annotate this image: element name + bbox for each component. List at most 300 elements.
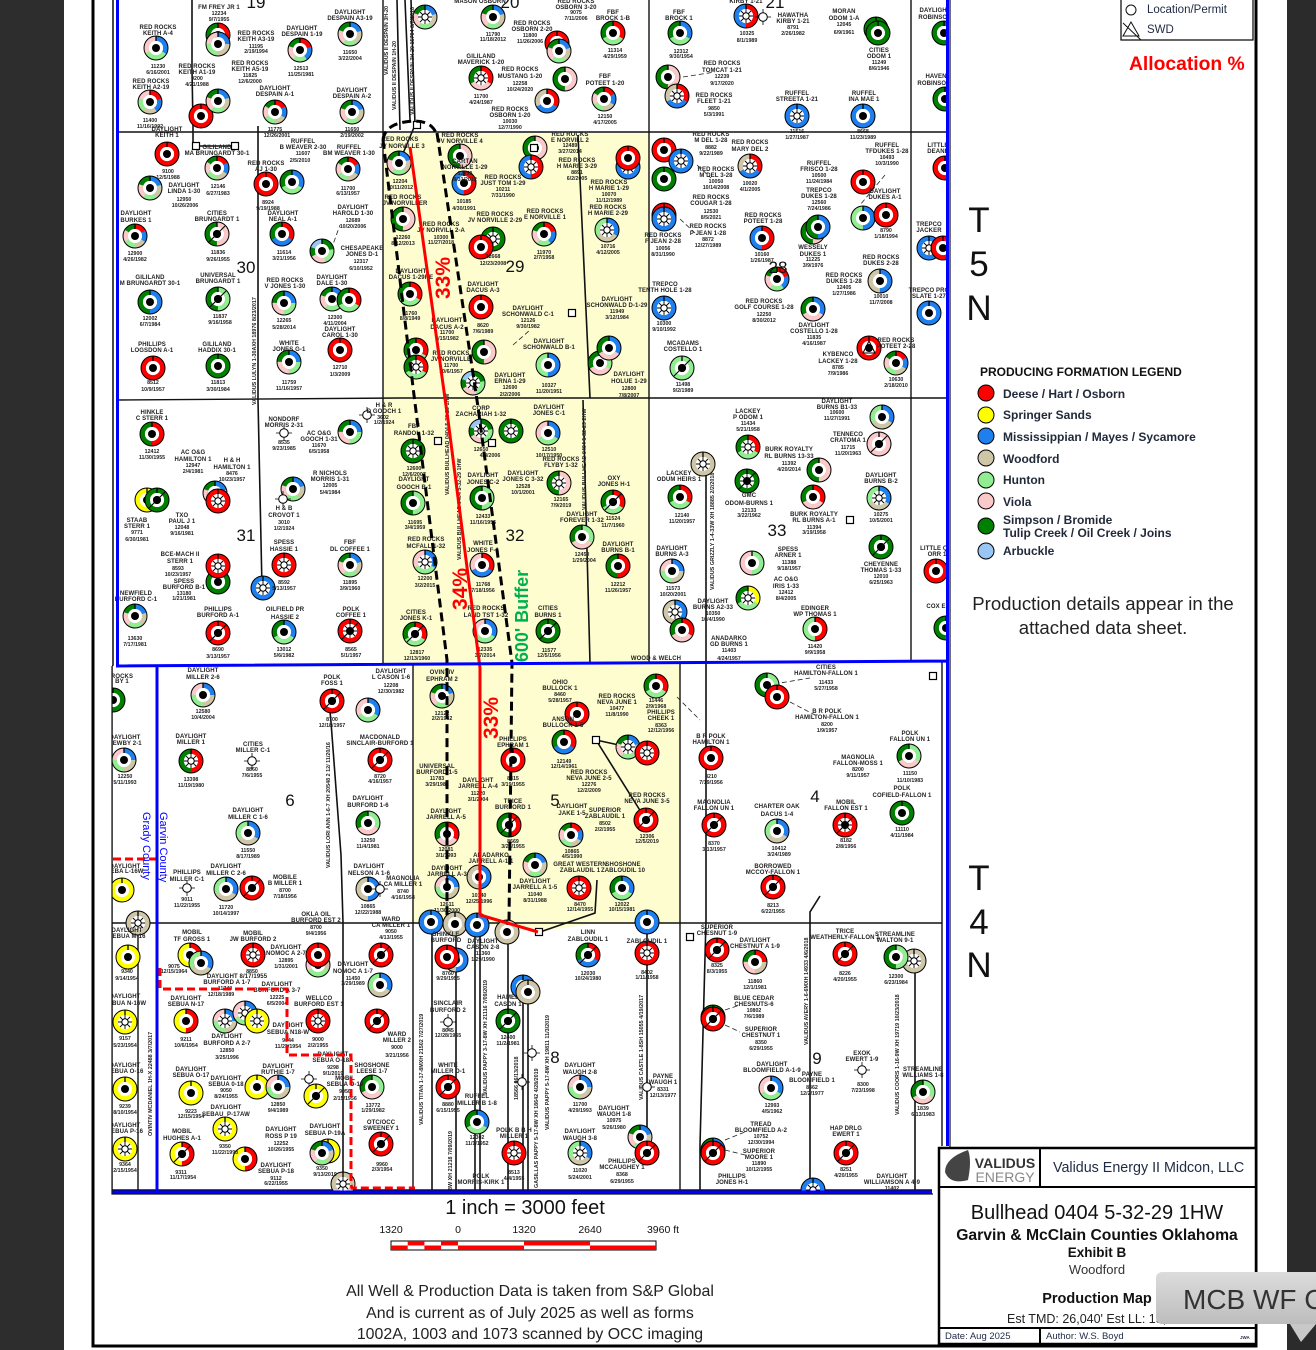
section 4 well names: MAGNOLIA [697,800,731,806]
section 29 well names: RED ROCKS [527,209,563,215]
sections 20-21 well data: 11800 [523,33,537,39]
section 6 well names: DAYLIGHT [176,734,207,740]
section 31 well data: 5/4/1984 [320,490,340,496]
section 29 well data: 10070 [602,192,616,198]
section 5 well data: 12276 [582,782,596,788]
section 33 well data: 12133 [742,508,756,514]
section 29 well names: NORVILLE 1-29 [442,165,488,171]
section 33 well data: 11420 [808,644,822,650]
section 28 well data: 9/2/1989 [673,388,693,394]
section 7 well names: DAYLIGHT [112,928,143,934]
section 8 well names: WHITE [438,1063,458,1069]
section 7 well names: HUGHES A-1 [163,1136,201,1142]
section 29 well names: JV NORVILLER [383,201,428,207]
section 29 well data: 9/30/1982 [516,324,540,330]
section 33 well data: 4/20/2014 [777,467,801,473]
producing formation legend [978,365,1196,559]
section 28 well data: 10/3/1990 [875,161,899,167]
section 33 well names: GD BURNS 1 [710,642,749,648]
section 7 well names: SEBUA P-18 [258,1169,295,1175]
section 32 well data: 12200 [418,576,432,582]
section numbers: 6 [285,791,295,810]
section 7 well data: 9157 [119,1036,131,1042]
section 29 well data: 8/12/2013 [391,241,415,247]
legend: Arbuckle [978,543,1055,559]
sections 20-21 well names: OSBORN 1-20 [489,113,531,119]
section 29 well data: 10716 [601,244,615,250]
section 9 well names: SUPERIOR [701,925,734,931]
section 5 well names: PHILLIPS [647,710,675,716]
section 5 well data: 3/1/2004 [468,797,488,803]
allocation percentages and buffer label: 34% [449,568,472,610]
section 32 well names: JONES K-1 [400,616,433,622]
section 5 well names: JARRELL A-1 1 [469,859,514,865]
section 31 well data: 7/17/1981 [123,642,147,648]
section 33 well names: RL BURNS 13-33 [764,454,814,460]
section 28 well names: DAYLIGHT [799,323,830,329]
section 32 well names: BURNS 1 [534,613,562,619]
section 28 well names: POTEET 2-28 [877,344,916,350]
section 33 well data: 10/20/2001 [660,592,686,598]
sections 20-21 well names: POTEET 1-20 [586,81,625,87]
section 5 well data: 11446 [649,698,663,704]
section 31 [115,403,402,660]
section 28 well names: TFDUKES 1-28 [865,149,909,155]
section 7 well data: 9340 [121,969,133,975]
yellow highlighted unit sections [383,133,680,932]
section 8 [419,910,678,1186]
section 29 well data: 8620 [477,323,489,329]
rotated lateral labels: 18566 06/13/2018 [514,1057,520,1100]
section 7 well data: 10/26/1955 [268,1147,294,1153]
section 8 well names: DAYLIGHT [468,939,499,945]
section 31 well names: BURFORD A-1 [197,613,240,619]
section 5 well names: RED ROCKS [629,793,665,799]
section 6 well data: 8720 [374,774,386,780]
section 19 well names: DAYLIGHT [287,26,318,32]
section 29 well names [379,132,648,385]
section 28 well data: 8882 [705,145,717,151]
section 33 well names: RL BURNS A-1 [792,518,836,524]
section 19 well names: DAYLIGHT [335,10,366,16]
section 32 well names: FOREVER 1-32 [560,518,604,524]
section 31 well data: 13180 [177,591,191,597]
section 7 well names: DAYLIGHT [110,1063,141,1069]
section 28 well data: 9/10/1992 [652,327,676,333]
section 33 well data: 3/19/1958 [802,530,826,536]
sections 20-21 well names: GILILAND [466,54,496,60]
section 7 well names: DAYLIGHT [338,962,369,968]
section 7 well data: 8/10/1954 [113,1110,137,1116]
section 31 well names: H & B [276,506,293,512]
600 ft buffer dashed lines [383,121,512,922]
section 7 well data: 1/29/1982 [361,1108,385,1114]
section 31 well names: BURFORD B-1 [163,585,206,591]
section 5 well names: JARRELL A-5 [426,815,466,821]
section 5 well names: EPHRAM 1 [497,743,529,749]
sections 20-21 well names: CITIES [869,48,889,54]
section 33 well data: 11403 [722,648,736,654]
section 31 well data: 8565 [345,647,357,653]
sections 20-21 well names: STREETA 1-21 [776,97,819,103]
map frame black outer [112,0,950,1194]
section 30 well names: PHILLIPS [138,342,166,348]
section 29 well data: 11949 [610,309,624,315]
section 7 well names: OTC/OCC [367,1120,396,1126]
section 19 well data: 11/25/1981 [288,72,314,78]
section 30 well data: 5/28/2014 [272,325,296,331]
section 28 well data: 12/27/1989 [695,243,721,249]
section 32 well data: 12335 [478,647,492,653]
section 7 well data: 9239 [119,1104,131,1110]
section 32 well data: 3/2/2015 [415,583,435,589]
section 5 well data: 11783 [430,776,444,782]
section 9 well data: 11402 [885,1186,899,1192]
section 31 well names: HASSIE 2 [271,615,300,621]
section 31 well names: D GOOCH 1 [367,409,402,415]
section 5 well data: 10865 [565,849,579,855]
section 28 well data: 10500 [812,173,826,179]
section 28 well data: 10056 [656,246,670,252]
section 6 well names: MILLER C-1 [170,877,205,883]
section 19 well names: KEITH A2-19 [133,85,170,91]
section 33 well names: ODOM-BURNS 1 [725,501,774,507]
section 29 well names: DAYLIGHT [468,282,499,288]
section 30 well data: 11614 [277,250,291,256]
section 7 well names: SWEENEY 1 [363,1126,399,1132]
section 5 well names: NEVA JUNE 2-5 [566,776,612,782]
section 8 well names: HAMEL [497,995,519,1001]
section 28 well names: M DEL 1-28 [694,138,728,144]
section 33 well names: IRIS 1-33 [773,584,800,590]
section 9 well data: 12/2/1977 [800,1091,824,1097]
section numbers: 33 [768,521,786,540]
section 32 well data: 3/7/2014 [475,653,495,659]
section 6 well data: 8/17/1989 [236,854,260,860]
section 7 well names: MILLER 2 [383,1038,412,1044]
section 6 well names: MILLER 2-6 [186,675,220,681]
section 7 well names: SEBUA O-17 [173,1073,210,1079]
section 6 well names: DAYLIGHT [188,668,219,674]
section 31 well data: 11/30/1955 [139,455,165,461]
section 33 well data: 11/20/1963 [835,451,861,457]
section 28 well names: DUKES 1-28 [801,194,837,200]
section 6 wells [101,683,392,935]
company logo [945,1150,1035,1185]
section 30 well data: 6/27/1983 [206,191,230,197]
section 5 well names: BURFORD 1-5 [416,770,458,776]
section 7 well names: DAYLIGHT [110,1123,141,1129]
county labels: Grady County [140,812,152,880]
section 33 well data: 12010 [874,574,888,580]
section 7 well names: SEBUA O-16 [107,1069,144,1075]
section 8 well names: SHINKLE [432,932,460,938]
legend: Viola [978,493,1032,509]
section 29 well names: DAYLIGHT [495,373,526,379]
section 19 well names: FM FREY JR 1 [198,5,240,11]
section 29 well data: 12800 [622,386,636,392]
section 31 well names: H & H [224,458,240,464]
section 6 well data: 11/22/1955 [174,903,200,909]
section 31 well data: 9/16/1981 [170,531,194,537]
section 33 well data: 10/4/1990 [701,617,725,623]
section 4 well names: BORROWED [754,864,792,870]
section 28 well names: LACKEY 1-28 [818,359,858,365]
section 6 well data [113,683,415,941]
section 7 well data: 2/2/1955 [308,1043,328,1049]
section 8 well data: 8331 [657,1087,669,1093]
section 4 well names: DACUS 1-4 [761,812,794,818]
section 6 well names: POLK [323,675,341,681]
section 33 [655,399,902,662]
section 7 well names: DAYLIGHT [171,996,202,1002]
section 32 well names: DAYLIGHT [534,405,565,411]
section 9 well names: EXOK [853,1051,871,1057]
section 7 well names: DAYLIGHT [273,1023,304,1029]
section 31 well data: 3010 [278,520,290,526]
section 33 well data: 9/9/1958 [805,650,825,656]
section 6 well names: SEBA L-16W [106,869,144,875]
section 30 well data: 12/5/1988 [156,175,180,181]
section 33 well names: DAYLIGHT [657,546,688,552]
section 30 well names: BRUNGARDT 1 [195,217,240,223]
section 5 well data: 8470 [574,902,586,908]
section 7 well names: SEBUA O-19 [327,1082,364,1088]
section 9 well data: 12300 [889,974,903,980]
title block: Validus Energy II Midcon, LLC [1053,1160,1244,1176]
title block: Author: W.S. Boyd [1046,1331,1124,1342]
east edge labels [909,8,954,610]
section 28 well names: RED ROCKS [693,195,729,201]
section 5 well data: 12/5/2019 [635,839,659,845]
sections 20-21 well names: RUFFEL [785,91,809,97]
section 29 well names: JV NORVILLE [431,357,471,363]
sections 20-21 well data: 12045 [837,22,851,28]
section 9 well names: TREAD [750,1122,772,1128]
section 30 well names [120,127,383,354]
section 7 well names: NOMOC A 1-7 [333,969,374,975]
section 30 well data [123,151,373,393]
sections 20-21 well names: BROCK 1-B [596,16,631,22]
section 19 well data: 9200 [191,76,203,82]
sections 20-21 well data: 2/26/1982 [781,31,805,37]
section 28 well data: 10010 [874,294,888,300]
section 6 well data: 12/30/1982 [378,689,404,695]
section 9 well data: 8300 [857,1082,869,1088]
section 19 well names: DESPAIN A-2 [333,94,372,100]
legend: Viola: Viola [1003,495,1032,509]
production note [972,593,1234,638]
section 8 well names: DAYLIGHT [565,1063,596,1069]
section 9 well names: CHESNUT 1-9 [697,931,738,937]
section 30 wells [123,142,361,380]
section 7 well names: SEBUA N-16W [104,1001,146,1007]
east edge labels: SLATE 1-27 [912,294,947,300]
section 9 well data: 8325 [711,963,723,969]
section 9 well data: 7/23/1998 [851,1088,875,1094]
rotated lateral labels: VALIDUS II DESPAIN 3H-20 15794 6/7/2018 [410,7,416,115]
section 31 well data: 3602 [377,415,389,421]
section 31 well data: 5/1/1957 [341,653,361,659]
section 4 well data: 3/24/1989 [767,852,791,858]
section 5 well data: 8363 [655,723,667,729]
section 6 well data: 8700 [326,717,338,723]
section 6 well names: FOSS 1 [321,681,344,687]
surface location markers [192,122,936,940]
section 33 well data: 12412 [779,590,793,596]
section 5 well data: 3/19/1955 [501,782,525,788]
section 31 well data: 5/6/1982 [274,653,294,659]
section 8 well data: 5/24/2001 [568,1175,592,1181]
section 4 well data: 10412 [772,846,786,852]
section 19 well data: 11825 [243,73,257,79]
section 8 well data: 5/26/1980 [602,1125,626,1131]
section 9 well names: STREAMLINE [875,932,915,938]
section 7 well names: DAYLIGHT [211,1105,242,1111]
section 32 well names [394,405,681,662]
section 8 well data: 11360 [476,951,490,957]
sections 20-21 well names: RED ROCKS [696,93,732,99]
section 7 well names: BURFORD A 3-7 [253,988,301,994]
section 7 well names: SHOSHONE [354,1063,390,1069]
section 7 well data: 9075 [168,964,180,970]
section 5 well data: 2/9/1968 [646,704,666,710]
sections 20-21 well data: 1/27/1987 [785,135,809,141]
section 31 well data: 8690 [212,647,224,653]
sections 20-21 well data: 5/3/1991 [704,112,724,118]
legend: Deese: Deese / Hart / Osborn [1003,387,1125,401]
section 33 wells [660,405,894,642]
section 7 well data: 9364 [119,1162,131,1168]
township labels: 4 [969,903,989,942]
section 5 well names: PHILLIPS [499,737,527,743]
title block: Exhibit B [1068,1245,1126,1260]
section 31 well names: HAMILTON 1 [174,457,212,463]
section 4 well data: 11110 [895,827,909,833]
section 19 well names: DESPAIN A-1 [256,92,295,98]
rotated lateral labels: VALIDUS BULLHEAD 0404 5-32-29 1HW [457,458,463,560]
section 6 well data: 13398 [184,777,198,783]
section 33 well data: 11715 [841,445,855,451]
section 7 well data: 8850 [246,969,258,975]
section 8 well data: 8513 [508,1170,520,1176]
section 33 well names: SPESS [778,547,798,553]
section 9 well data: 8350 [755,1040,767,1046]
section 32 well names: ZACHARIAH 1-32 [456,412,507,418]
sections 20-21 well names: MUSTANG 1-20 [498,74,543,80]
section 32 well names: CORP [472,406,490,412]
section 8 well data: 6/15/1955 [436,1108,460,1114]
section 28 well data: 1/18/1994 [874,234,898,240]
section 19 well names: RED ROCKS [232,61,268,67]
section 7 well names: DAYLIGHT [261,1163,292,1169]
section 28 well names: RED ROCKS [645,233,681,239]
section 19 well names: KEITH A5-19 [232,67,269,73]
section 8 well data: 12302 [470,1135,484,1141]
section 31 well names: NEWFIELD [120,591,153,597]
map scale: 1320 [379,1224,403,1236]
section 28 well data: 12560 [812,200,826,206]
section 33 well data: 10600 [830,410,844,416]
section 30 well data: 12689 [346,218,360,224]
symbol key box [1121,0,1253,40]
section 9 well data: 8251 [840,1167,852,1173]
section 28 well names: COUGAR 1-28 [690,201,732,207]
sections 20-21 well names: OSBORN 3-20 [555,5,597,11]
section 8 well names [430,930,678,1186]
section 30 well data: 2/5/2010 [290,158,310,164]
section 33 well data: 11573 [666,586,680,592]
section 4 well data: 8370 [708,841,720,847]
section 7 well names: DAYLIGHT [318,1052,349,1058]
section 7 well names: MOBIL [335,1076,355,1082]
section 4 wells [699,673,921,899]
section 29 well names: ERNA 1-29 [494,379,526,385]
section 31 well data: 3/13/1957 [206,654,230,660]
section 4 well names: B R POLK [696,734,726,740]
section 28 well names: GOLF COURSE 1-28 [734,305,794,311]
section 5 well names: BURFORD 1 [495,805,532,811]
section 7 well data: 9/13/2019 [313,1172,337,1178]
section 33 well data: 4/24/1957 [717,656,741,662]
section 7 well names: SEBUA P-19A [305,1131,346,1137]
section 28 well names: KYBENCO [823,352,854,358]
section 32 well names: RED ROCKS [468,606,504,612]
section 8 well names: POLK B B H [496,1128,532,1134]
section 6 well data: 10/4/2004 [191,715,215,721]
section 7 well data: 10/6/1954 [174,1043,198,1049]
section 19 well names: RED ROCKS [133,79,169,85]
section 29 well data: 2/2/2006 [500,392,520,398]
section 28 well data: 10020 [743,181,757,187]
section 19 well data: 2/19/1994 [244,49,268,55]
section 7 well names: SEBAU_P-17AW [202,1112,250,1118]
section 32 well names: JONES C-1 [533,411,566,417]
section 7 well names: DAYLIGHT [266,1127,297,1133]
section 6 well names: NEWBY 2-1 [108,741,142,747]
section 30 well names: DAYLIGHT [317,275,348,281]
rotated lateral labels: VALIDUS II DESPAIN 3H-20 [384,6,390,75]
section 7 well data: 3/25/1996 [215,1055,239,1061]
sections 20-21 well names [454,0,892,119]
sections 20-21 well data: 4/24/1987 [469,100,493,106]
section 4 well data: 11/10/1983 [897,778,923,784]
section 31 well names: H & R [376,403,393,409]
section 28 well data: 10/14/2008 [703,185,729,191]
township labels: 5 [969,245,989,284]
title block: Bullhead 0404 5-32-29 1HW [971,1202,1223,1224]
section 4 well data: 8213 [767,903,779,909]
section 30 well data: 6/13/1957 [336,191,360,197]
section 31 well names: FBF [344,540,356,546]
legend: Woodford: Woodford [1003,452,1059,466]
section 6 well data: 12208 [384,683,398,689]
section 33 well data: 10/5/2001 [869,518,893,524]
section 29 well data: 11/20/1951 [536,389,562,395]
section 33 well names: THOMAS 1-33 [861,568,902,574]
section 31 well data: 5/13/1957 [272,586,296,592]
section 7 well names: DAYLIGHT [176,1067,207,1073]
section 30 well data: 12950 [177,197,191,203]
section 8 well data: 8402 [641,970,653,976]
section 28 well names: MARY DEL 2 [732,147,769,153]
east edge labels: TREPCO PRO [909,288,950,294]
sections 20 and 21 [413,0,892,141]
section 6 well names: NELSON A 1-6 [348,871,391,877]
township labels: N [966,946,992,985]
section 9 well names: STREAMLINE [903,1067,943,1073]
section 28 well names: DUKES 1-28 [826,279,862,285]
